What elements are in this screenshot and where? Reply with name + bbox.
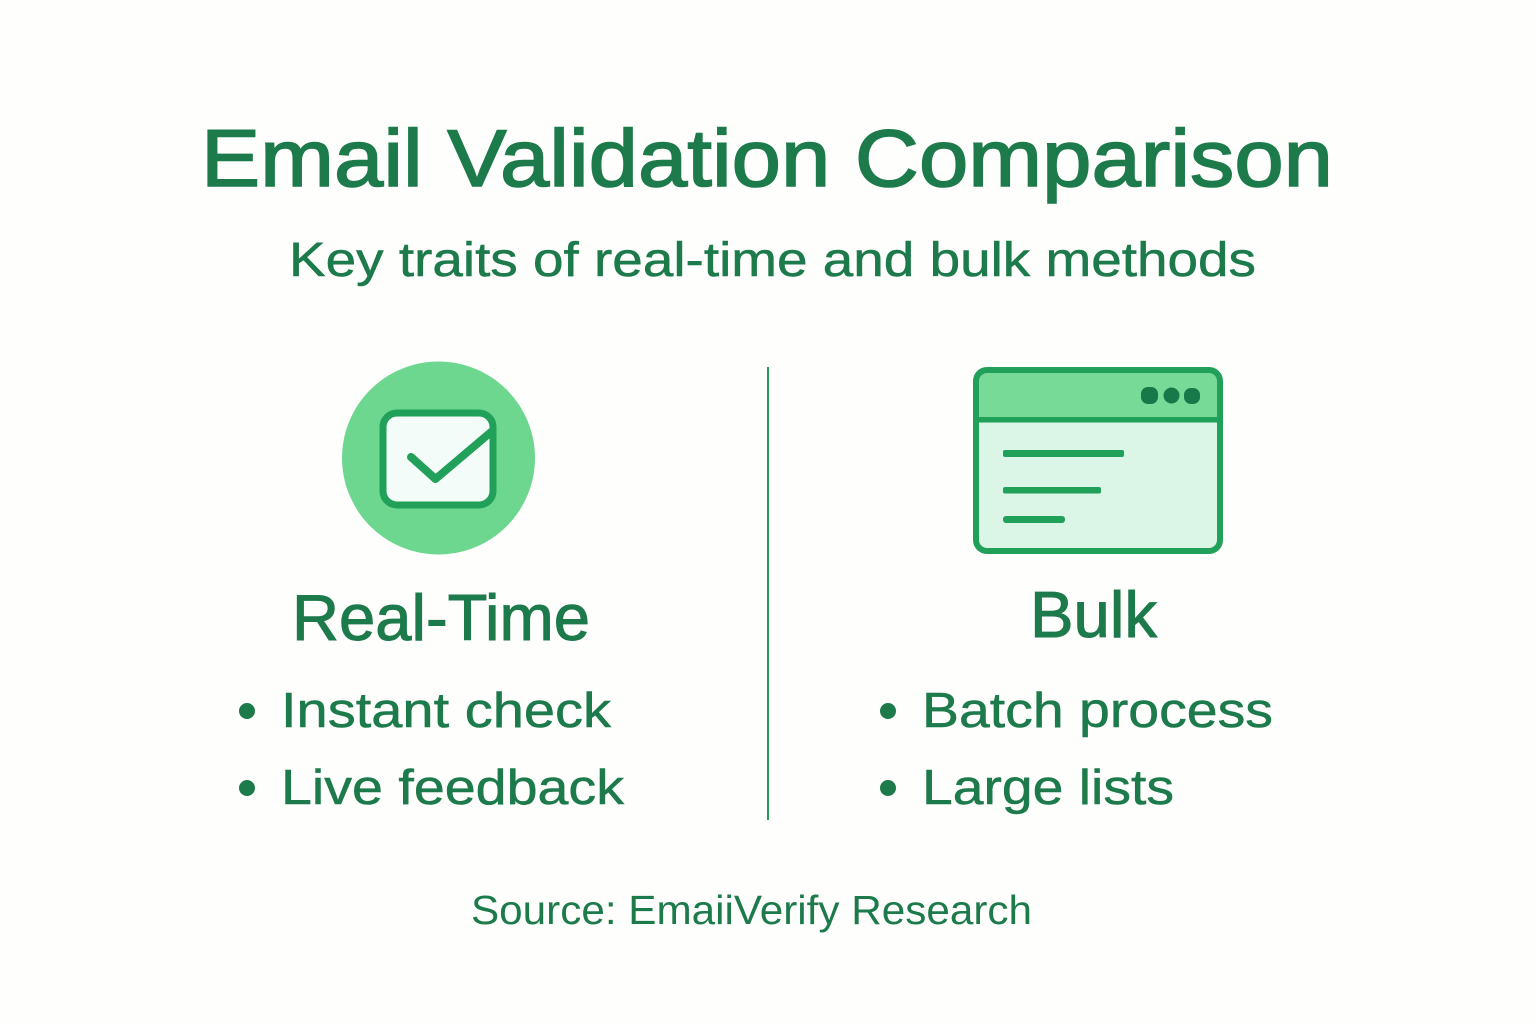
panel: real-time xyxy=(239,362,625,815)
title: Email Validation Comparison xyxy=(201,114,1333,204)
icon: browser window xyxy=(974,370,1222,551)
bullet: batch process: Batch process xyxy=(922,684,1273,738)
icon: email check xyxy=(342,362,535,554)
source note: Source: EmaiiVerify Research xyxy=(471,887,1032,933)
bullet: live feedback: Live feedback xyxy=(281,761,625,815)
bullet: instant check: Instant check xyxy=(281,684,612,738)
bullet: large lists: Large lists xyxy=(922,761,1174,815)
subtitle: Key traits of real-time and bulk methods xyxy=(289,234,1256,287)
panel: bulk xyxy=(880,370,1273,815)
heading: real-time: Real-Time xyxy=(292,581,590,654)
divider xyxy=(767,367,769,820)
heading: bulk: Bulk xyxy=(1030,578,1157,651)
